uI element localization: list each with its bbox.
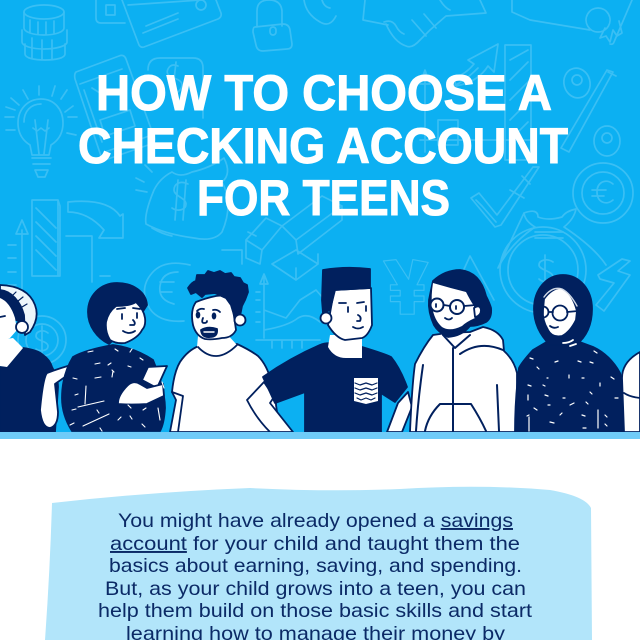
icon: piggy bbox=[304, 0, 336, 24]
icon: banknote bbox=[148, 58, 203, 118]
person 3: teen in white t-shirt bbox=[170, 271, 280, 432]
intro paragraph: But, as your child grows into a teen, you can bbox=[105, 578, 526, 600]
blue header background bbox=[0, 0, 640, 432]
icon: ribbon arrow right bbox=[596, 259, 630, 311]
intro paragraph: You might have already opened a savings bbox=[118, 510, 513, 532]
person 6: teen in patterned hijab bbox=[515, 275, 625, 432]
icon: percent sign bbox=[561, 65, 620, 156]
icon: light bulb bbox=[5, 86, 77, 177]
intro paragraph: basics about earning, saving, and spending. bbox=[109, 555, 522, 577]
icon: warning triangle and coin bbox=[450, 227, 586, 313]
intro paragraph: account for your child and taught them the bbox=[110, 533, 520, 555]
icon: smartphone bbox=[75, 55, 155, 160]
intro paragraph: help them build on those basic skills and start bbox=[98, 600, 533, 622]
person 5: teen in white hoodie with glasses bbox=[410, 270, 517, 432]
icon: euro coin bbox=[573, 163, 633, 223]
icon: euro circle coin bbox=[144, 250, 242, 325]
person 4: teen in navy pocket t-shirt bbox=[247, 268, 412, 432]
intro paragraph bbox=[98, 510, 533, 640]
icon: rising arrow bbox=[448, 44, 498, 88]
title bbox=[78, 65, 568, 226]
icon: dollar coin bbox=[18, 316, 66, 364]
background money doodles bbox=[5, 0, 633, 364]
icon: padlock bbox=[253, 0, 292, 51]
icon: money bag bbox=[136, 158, 228, 239]
icon: certificate bbox=[512, 0, 632, 44]
icon: money bag right bbox=[498, 209, 606, 268]
icon: bar chart and curved arrow bbox=[8, 200, 123, 296]
illustration: group of teens bbox=[0, 268, 640, 432]
icon: credit card bbox=[96, 0, 221, 47]
icon: coin stack bbox=[22, 5, 67, 60]
white lower page bbox=[0, 439, 640, 640]
icon: gold bars bbox=[246, 196, 342, 280]
title: HOW TO CHOOSE A bbox=[96, 65, 552, 121]
light blue ground band bbox=[0, 432, 640, 439]
person 7: teen cut off at right edge bbox=[622, 352, 640, 432]
person 2: teen reading a card bbox=[62, 283, 167, 431]
icon: line chart bbox=[256, 274, 330, 348]
panel: intro text blob bbox=[45, 487, 592, 640]
icon: check mark bbox=[471, 167, 539, 227]
icon: yuan sign bbox=[383, 260, 428, 314]
icon: chart behind title bbox=[420, 45, 532, 160]
icon: handshake bbox=[363, 0, 486, 47]
person 1: teen in beanie bbox=[0, 285, 78, 432]
title: FOR TEENS bbox=[197, 170, 450, 226]
title: CHECKING ACCOUNT bbox=[78, 118, 568, 174]
